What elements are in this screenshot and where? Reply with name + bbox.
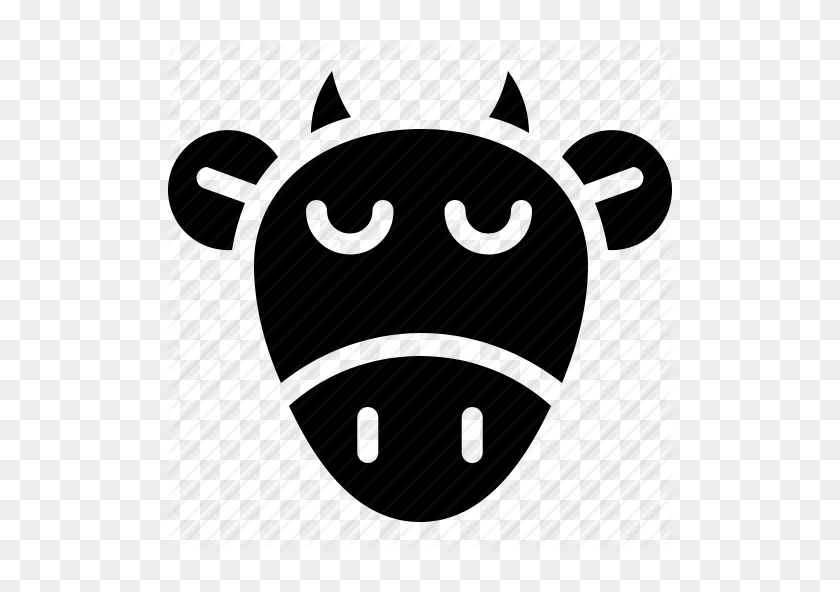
head with closed eyes: [254, 129, 588, 383]
dark diagonal stripes: [160, 35, 680, 555]
left ear: [168, 130, 278, 250]
snout with nostrils: [289, 356, 551, 522]
right horn: [489, 71, 529, 133]
right ear: [562, 130, 672, 250]
light diagonal stripes: [174, 50, 666, 540]
left horn: [311, 71, 351, 133]
icon: cow face: [168, 71, 672, 522]
